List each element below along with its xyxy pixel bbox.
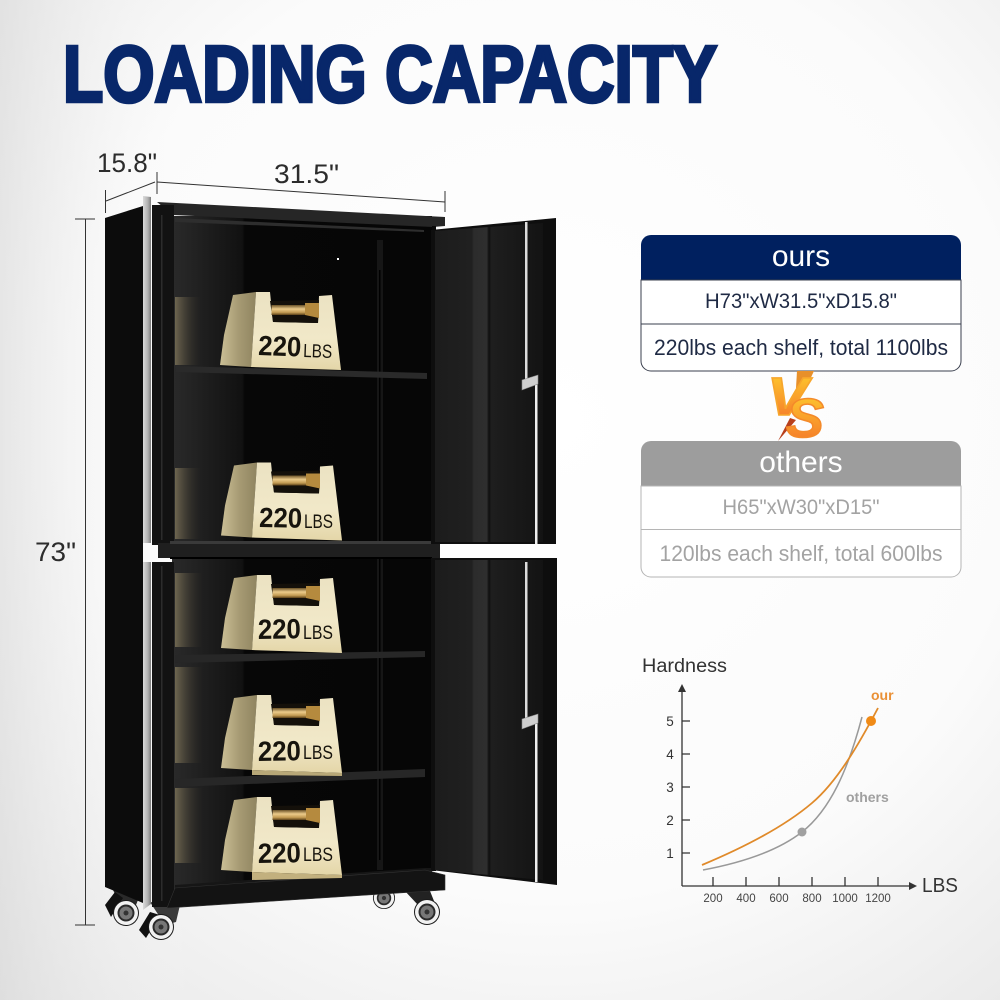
weight 3 [221, 575, 342, 653]
weight 1: LBS [303, 341, 333, 363]
chart axis labels: 4 [666, 747, 674, 762]
cabinet bottom plinth [167, 870, 445, 908]
weight reflections on left wall [175, 297, 202, 863]
silver edge lower [143, 562, 151, 910]
weight 5: 220 [258, 837, 301, 869]
VS badge: S [786, 387, 824, 449]
comparison table: others: 120lbs each shelf, total 600lbs [660, 541, 942, 566]
weight 5 [221, 797, 342, 880]
comparison table: ours: H73"xW31.5"xD15.8" [705, 290, 897, 313]
weight 4 [221, 695, 342, 776]
chart axis labels: LBS [922, 875, 958, 897]
chart axis labels: 5 [666, 714, 674, 729]
cabinet middle band [158, 541, 440, 559]
chart axes [678, 684, 917, 890]
comparison table: ours: ours [772, 240, 830, 273]
chart axis labels [642, 656, 958, 905]
comparison table: others [641, 441, 961, 577]
comparison table: others: others [759, 446, 843, 479]
weight 3: LBS [303, 623, 333, 644]
lower door [431, 558, 557, 885]
chart axis labels: 800 [802, 893, 822, 905]
comparison table: others: H65"xW30"xD15" [722, 496, 880, 519]
weight 1: 220 [258, 330, 302, 362]
weight 4: LBS [303, 743, 333, 764]
dimension: height 73 inches: 73" [35, 537, 76, 567]
weight 2: 220 [259, 502, 302, 534]
wheel: front right [404, 890, 440, 925]
chart axis labels: 600 [769, 893, 789, 905]
cabinet front frame [152, 205, 436, 907]
curve: others [703, 717, 889, 870]
bottom floor [175, 868, 432, 890]
comparison table: ours [641, 235, 961, 371]
dimension: depth 15.8 inches [97, 148, 157, 213]
weight 3: 220 [258, 613, 301, 645]
cabinet interior [172, 216, 432, 890]
wheel: rear right [373, 887, 395, 909]
curve: our: our [871, 687, 894, 703]
weight 1 [220, 292, 341, 370]
upper inner lip [175, 218, 424, 232]
chart axis labels: 3 [666, 780, 674, 795]
title: LOADING CAPACITY [63, 30, 717, 118]
hardness chart [642, 656, 958, 905]
shelf 3 [175, 769, 425, 787]
interior rear rail details [337, 240, 383, 870]
comparison table: ours: 220lbs each shelf, total 1100lbs [654, 335, 948, 360]
wheel: rear left [105, 888, 140, 926]
upper door [431, 218, 556, 544]
weight 2: LBS [304, 512, 333, 533]
chart axis labels: 200 [703, 893, 723, 905]
chart axis labels: 2 [666, 813, 674, 828]
weight 5: LBS [303, 845, 333, 866]
chart axis labels: 1000 [832, 893, 858, 905]
dimension: depth 15.8 inches: 15.8" [97, 148, 157, 178]
cabinet [105, 196, 557, 940]
cabinet side panel [105, 206, 143, 903]
chart axis labels: 1200 [865, 893, 891, 905]
wheel: front left [139, 902, 180, 940]
cabinet top [157, 202, 445, 227]
weight 2 [221, 462, 342, 540]
dimension: width 31.5 inches: 31.5" [274, 159, 339, 189]
chart axis labels: 1 [666, 846, 674, 861]
shelf 1 [176, 366, 427, 379]
weight 4: 220 [258, 735, 301, 767]
VS badge: V [767, 367, 813, 427]
chart axis labels: 400 [736, 893, 756, 905]
shelf 2 [175, 651, 425, 663]
silver edge upper [143, 196, 151, 543]
dimension: width 31.5 inches [157, 159, 445, 212]
curve: our [702, 687, 894, 865]
chart axis labels: Hardness [642, 656, 727, 677]
curve: others: others [846, 789, 889, 805]
VS badge [767, 367, 824, 449]
